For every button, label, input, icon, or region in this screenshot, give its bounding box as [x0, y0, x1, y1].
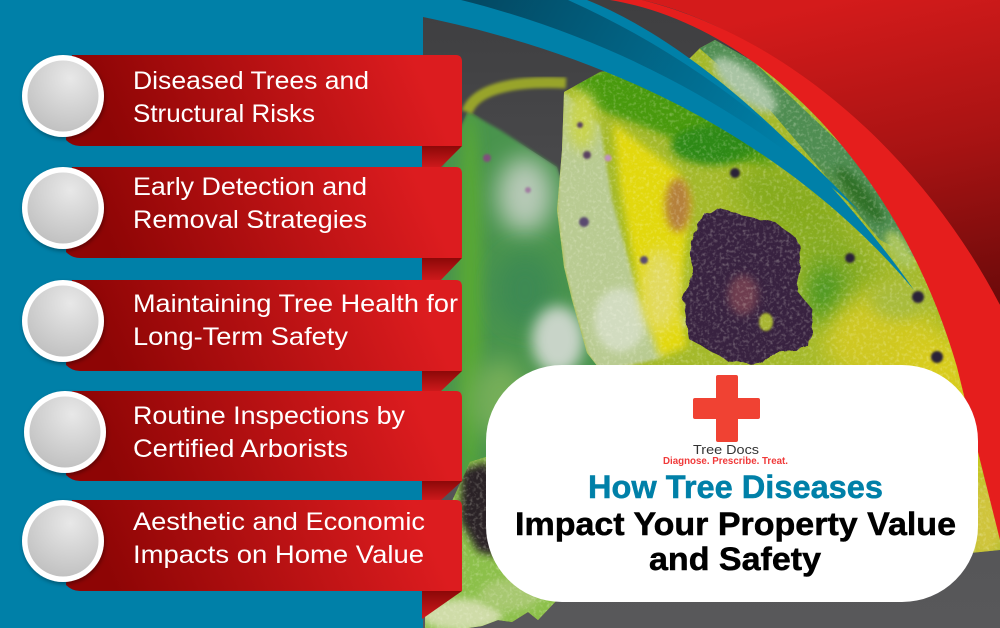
photo: diseased leaf: [422, 0, 1000, 628]
label: Aesthetic and Economic: [133, 508, 425, 536]
ribbon fold: [422, 371, 462, 392]
vein texture: [425, 0, 1000, 628]
label: [133, 290, 458, 351]
list item 4: [24, 391, 462, 501]
label: Impacts on Home Value: [133, 541, 424, 569]
upper strip: [700, 40, 914, 257]
icon disc: [22, 280, 104, 362]
top green: [571, 72, 776, 170]
label: Early Detection and: [133, 173, 367, 201]
label: Certified Arborists: [133, 435, 348, 463]
ribbon fold: [422, 481, 462, 501]
pale left lobe: [557, 92, 690, 372]
ribbon fold: [422, 591, 462, 619]
decorative swoosh: red band: [610, 0, 1000, 540]
ribbon fold: [422, 258, 462, 281]
label: [133, 67, 369, 128]
yellow lobe: [613, 123, 690, 357]
icon disc: [22, 167, 104, 249]
logo name: Tree Docs: [693, 442, 760, 457]
dark lesion: [683, 207, 813, 363]
label: [133, 508, 425, 569]
icon disc: [24, 391, 106, 473]
heading line 2: Impact Your Property Value: [515, 506, 956, 542]
label: [133, 402, 406, 463]
list item 1: [22, 55, 462, 168]
label: Removal Strategies: [133, 206, 367, 234]
right side colour fields: [732, 152, 853, 242]
title panel: [486, 365, 978, 602]
leaf spots: [483, 122, 943, 363]
ribbon: [66, 167, 462, 258]
list item 5: [22, 500, 462, 619]
ribbon fold: [422, 146, 462, 168]
decorative corner: dark red: [642, 0, 1000, 305]
background: blue panel: [0, 0, 423, 628]
panel background: [486, 365, 978, 602]
label: Long-Term Safety: [133, 323, 349, 351]
heading line 1: How Tree Diseases: [588, 469, 883, 505]
main leaf surface: [422, 0, 1000, 628]
ribbon: [66, 55, 462, 146]
label: Routine Inspections by: [133, 402, 406, 430]
label: [133, 173, 367, 234]
ribbon: [66, 500, 462, 591]
ribbon: [66, 391, 462, 481]
heading line 3: and Safety: [649, 541, 821, 577]
list item 2: [22, 167, 462, 281]
label: Maintaining Tree Health for: [133, 290, 458, 318]
label: Structural Risks: [133, 100, 315, 128]
logo tagline: Diagnose. Prescribe. Treat.: [663, 456, 788, 467]
ribbon: [66, 280, 462, 371]
logo: red cross: [693, 375, 760, 442]
blurred back leaf: [430, 83, 600, 490]
lower left lobe: [425, 457, 556, 628]
icon disc: [22, 500, 104, 582]
leaf stem: [467, 83, 566, 112]
icon disc: [22, 55, 104, 137]
label: Diseased Trees and: [133, 67, 369, 95]
decorative swoosh: blue band: [423, 0, 914, 290]
list item 3: [22, 280, 462, 392]
